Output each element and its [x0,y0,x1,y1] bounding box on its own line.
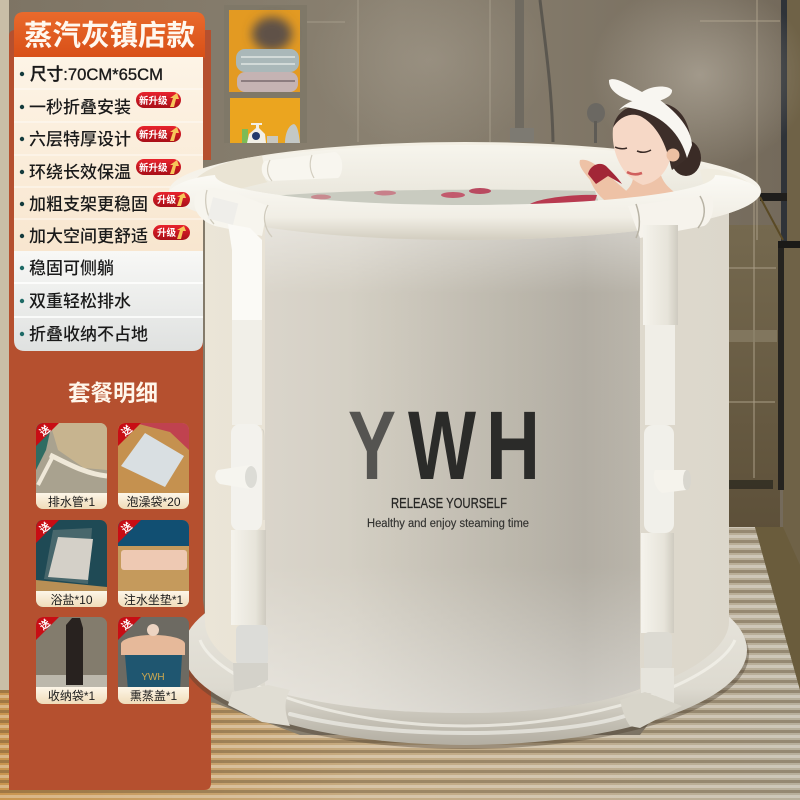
card: steam lid: 熏蒸盖*1 [130,689,177,703]
left product panel [9,12,211,790]
card: bath salt [36,520,107,607]
feature: folding storage: 折叠收纳不占地 [29,325,148,344]
tub outer wall [205,205,729,713]
badge: new upgrade 3 [136,159,181,175]
gift tag 2: 送 [119,422,135,439]
right rim joint [628,196,713,238]
badge: upgrade 1: 升级 [157,194,177,206]
feature: six layers: 六层特厚设计 [29,130,131,149]
right support post [620,225,691,728]
badge: new upgrade 2: 新升级 [139,129,168,141]
feature: heat retention: 环绕长效保温 [29,163,131,182]
gift tag 5: 送 [37,616,53,633]
gift tag 2 [118,422,141,446]
card: steam lid [118,617,189,704]
badge: new upgrade 1: 新升级 [139,95,168,107]
left support post [215,224,290,726]
badge: upgrade 2 [153,225,190,240]
card: water cushion [118,520,189,607]
gift tag 6 [118,616,141,640]
feature: size: 尺寸:70CM*65CM [30,65,163,84]
gift tag 6: 送 [119,616,135,633]
subtitle: Healthy and enjoy steaming time [367,518,529,530]
rim back and inner wall [169,142,761,240]
badge: upgrade 2: 升级 [157,227,177,239]
tagline: RELEASE YOURSELF [391,495,507,512]
tub base ring [181,555,749,749]
card: steam lid: YWH [141,672,165,683]
upper left tube connector [262,152,342,181]
package panel contents [36,92,190,704]
gift tag 4: 送 [119,519,135,536]
front rim tube [169,175,761,240]
feature list [14,57,203,351]
card: bath bags: 泡澡袋*20 [126,495,181,509]
gift tag 4 [118,519,141,543]
water with rose petals [265,188,600,206]
feature: one-second fold: 一秒折叠安装 [29,98,131,117]
title banner: 蒸汽灰镇店款 [24,20,195,52]
card: bath salt: 浴盐*10 [50,593,93,607]
gift tag 3 [36,519,59,543]
badge: new upgrade 3: 新升级 [139,162,168,174]
gift tag 1 [36,422,59,446]
woman in bath [580,79,701,204]
gift tag 5 [36,616,59,640]
brand logo YWH: W [408,391,476,500]
gift tag 1: 送 [37,422,53,439]
panel backing [9,30,211,790]
feature: thicker frame: 加粗支架更稳固 [29,195,148,214]
striped floor mat [0,527,800,800]
brand logo YWH [348,391,540,500]
card: storage bag [36,617,107,704]
card: bath bags [118,423,189,509]
brand logo YWH: Y [348,391,396,500]
feature: drainage: 双重轻松排水 [29,292,131,311]
front panel [265,225,640,713]
card: storage bag: 收纳袋*1 [48,689,95,703]
badge: upgrade 1 [153,192,190,207]
base ring front highlight [290,714,625,733]
gift tag 3: 送 [37,519,53,536]
wall niche shelf with towels and bottles [224,5,307,143]
brand logo YWH: H [486,391,540,500]
title banner [14,12,205,58]
card: drain hose [36,423,107,509]
feature: lie sideways: 稳固可侧躺 [29,259,114,278]
card: drain hose: 排水管*1 [48,494,95,509]
badge: new upgrade 1 [136,92,181,108]
package heading: 套餐明细 [68,381,158,406]
feature: more space: 加大空间更舒适 [29,227,148,246]
bathtub [169,79,761,749]
left rim joint [194,188,268,236]
card: water cushion: 注水坐垫*1 [124,592,183,607]
badge: new upgrade 2 [136,126,181,142]
